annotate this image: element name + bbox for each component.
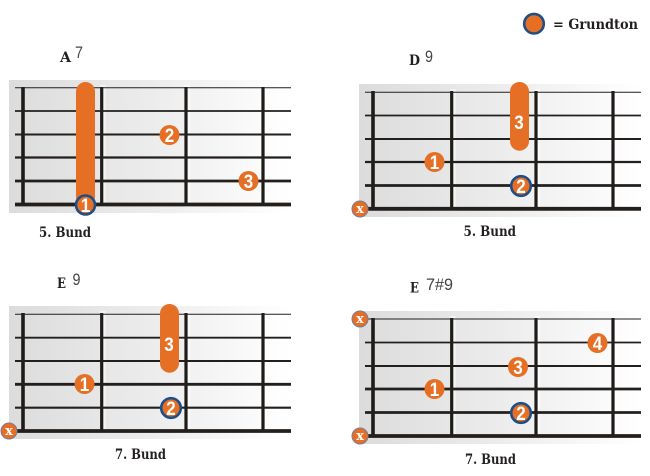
finger 1: 1 bbox=[430, 153, 440, 174]
legend: root note bbox=[524, 14, 638, 33]
legend text: = Grundton bbox=[553, 17, 638, 33]
panel: E9 chord bbox=[1, 270, 291, 463]
muted string: x bbox=[356, 202, 364, 217]
panel: D9 chord bbox=[352, 47, 641, 240]
fret label: 5. Bund bbox=[39, 225, 91, 241]
finger 2 root: 2 bbox=[516, 177, 526, 198]
muted string top bbox=[352, 311, 368, 327]
finger 4 bbox=[588, 333, 608, 355]
muted string bottom bbox=[352, 428, 368, 444]
fret label: 7. Bund bbox=[465, 452, 516, 468]
muted string: x bbox=[5, 424, 13, 439]
fret label: 5. Bund bbox=[464, 224, 516, 240]
finger 3: 3 bbox=[244, 172, 253, 193]
fretboard E9 bbox=[9, 306, 291, 439]
chord title E7#9 bbox=[410, 275, 453, 296]
finger 3 bbox=[508, 357, 528, 379]
finger 3 barre: 3 bbox=[164, 335, 174, 356]
barre finger 1 bbox=[76, 82, 95, 206]
chord title A7: A bbox=[59, 50, 72, 66]
finger 1 bbox=[424, 152, 444, 174]
chord title E9: 9 bbox=[72, 270, 80, 289]
finger 1 bbox=[74, 374, 94, 396]
chord title D9: D bbox=[409, 53, 420, 69]
finger 2: 2 bbox=[165, 126, 174, 147]
finger 1: 1 bbox=[430, 380, 440, 401]
finger 2 root: 2 bbox=[516, 404, 526, 425]
fretboard E7#9 bbox=[359, 311, 641, 444]
muted string bbox=[352, 201, 368, 217]
finger 2 root: 2 bbox=[166, 399, 176, 420]
finger 4: 4 bbox=[593, 334, 603, 355]
finger 3 bbox=[238, 171, 258, 193]
chord title E7#9: 7#9 bbox=[426, 275, 453, 294]
finger 2 root bbox=[511, 403, 531, 425]
fretboard D9 bbox=[359, 84, 641, 217]
chord title A7: 7 bbox=[75, 43, 83, 62]
chord title A7 bbox=[59, 43, 83, 66]
finger 3 barre bbox=[510, 82, 529, 151]
finger 2 bbox=[160, 125, 180, 147]
chord title D9 bbox=[409, 47, 433, 69]
finger 3 barre bbox=[160, 304, 179, 373]
finger 2 root bbox=[511, 176, 531, 198]
chord title D9: 9 bbox=[425, 47, 433, 66]
muted string top: x bbox=[356, 312, 364, 327]
finger 1 root bbox=[76, 196, 95, 217]
panel: A7 chord bbox=[9, 43, 291, 241]
finger 1 bbox=[424, 379, 444, 401]
finger 3: 3 bbox=[513, 358, 523, 379]
finger 2 root bbox=[161, 398, 181, 420]
fret label: 7. Bund bbox=[115, 447, 166, 463]
fretboard A7 bbox=[9, 80, 291, 213]
finger 3 barre: 3 bbox=[514, 113, 524, 134]
finger 1: 1 bbox=[80, 375, 90, 396]
panel: E7#9 chord bbox=[352, 275, 641, 468]
muted string bottom: x bbox=[356, 429, 364, 444]
chord title E9: E bbox=[57, 276, 66, 292]
chord title E9 bbox=[57, 270, 80, 292]
chord title E7#9: E bbox=[410, 280, 419, 296]
finger 1 root: 1 bbox=[81, 196, 91, 217]
icon: root note marker bbox=[524, 14, 544, 33]
muted string bbox=[1, 423, 17, 439]
